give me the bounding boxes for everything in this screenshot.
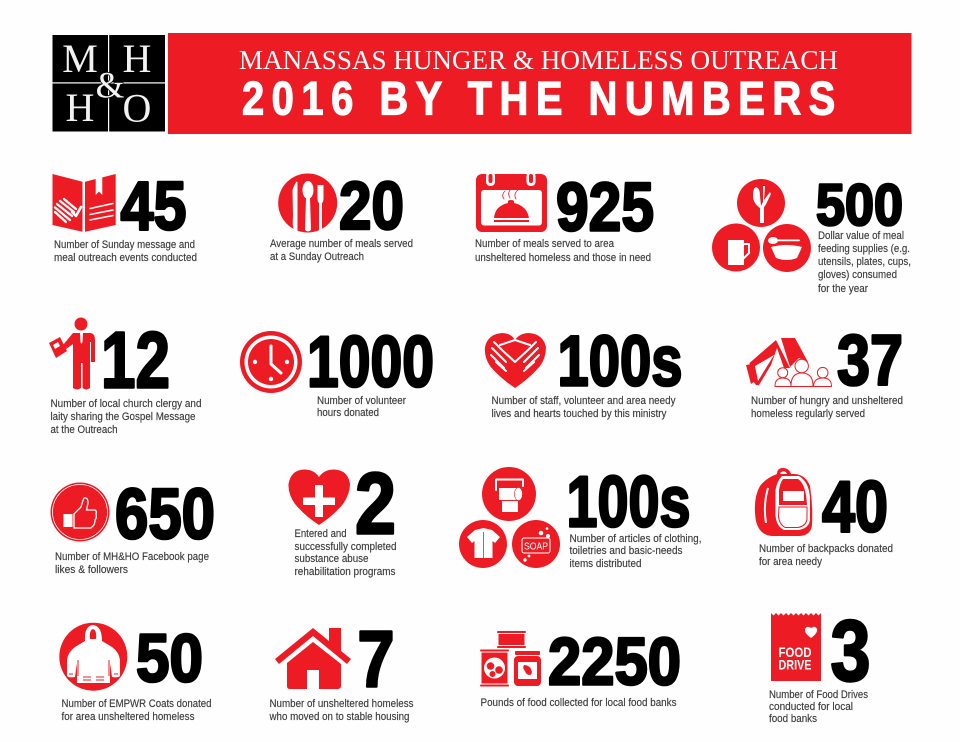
description: Number of EMPWR Coats donated: [62, 698, 212, 710]
description: Number of MH&HO Facebook page: [55, 551, 209, 563]
description: Number of unsheltered homeless: [270, 698, 414, 710]
number: 100s: [566, 462, 690, 542]
description: likes & followers: [55, 564, 128, 576]
description: [570, 533, 702, 570]
description: for area needy: [759, 556, 822, 568]
description: Entered and: [294, 528, 346, 540]
number: 2250: [548, 624, 681, 700]
description: [269, 698, 414, 723]
description: at the Outreach: [50, 424, 118, 436]
stat: 7 stable housing: [269, 614, 414, 723]
stat: 1000 volunteer hours: [240, 322, 434, 419]
description: for the year: [818, 283, 868, 295]
banner subtitle: MANASSAS HUNGER & HOMELESS OUTREACH: [239, 44, 838, 75]
stat: 2250 pounds of food: [480, 624, 681, 709]
description: for area unsheltered homeless: [62, 711, 195, 723]
description: [751, 395, 903, 420]
description: homeless regularly served: [751, 408, 865, 420]
icon: food drive bag: FOOD: [778, 644, 812, 660]
stat: 50 EMPWR coats: [59, 620, 212, 723]
number: 1000: [307, 322, 434, 402]
description: [294, 528, 396, 578]
logo: MH&HO: M: [62, 36, 98, 81]
number: 100s: [558, 322, 682, 402]
description: feeding supplies (e.g.: [818, 243, 910, 255]
description: who moved on to stable housing: [269, 711, 410, 723]
description: utensils, plates, cups,: [818, 256, 911, 268]
icon: toiletries, shirt and soap: [459, 467, 560, 568]
logo: MH&HO: [52, 35, 165, 132]
stat: 650 Facebook likes: [50, 476, 215, 576]
description: [54, 239, 197, 264]
description: [759, 543, 893, 568]
stat: 40 backpacks: [755, 468, 893, 568]
icon: toiletries, shirt and soap: SOAP: [524, 540, 548, 552]
description: substance abuse: [294, 553, 368, 565]
description: Average number of meals served: [270, 238, 413, 250]
icon: thumbs up: [50, 482, 110, 542]
stat: 3 food drives: [769, 604, 870, 725]
icon: food drive bag: [771, 613, 821, 681]
logo: MH&HO: H: [123, 36, 151, 81]
icon: clock: [240, 331, 302, 393]
description: Number of Food Drives: [769, 689, 868, 701]
icon: coat in circle: [59, 623, 127, 691]
banner title: 2016 BY THE NUMBERS: [242, 74, 835, 125]
description: Number of volunteer: [317, 395, 406, 407]
description: conducted for local: [769, 701, 853, 713]
number: 7: [358, 614, 394, 704]
description: [769, 689, 868, 725]
description: Number of staff, volunteer and area needy: [492, 395, 676, 407]
description: [270, 238, 413, 263]
logo: MH&HO: H: [66, 85, 94, 130]
description: food banks: [769, 713, 817, 725]
number: 40: [822, 468, 888, 548]
number: 2: [355, 456, 396, 552]
number: 500: [816, 173, 903, 238]
icon: cans and jar: [480, 631, 541, 686]
number: 925: [556, 168, 654, 246]
number: 37: [837, 322, 903, 400]
stat: 37 regularly served: [746, 322, 903, 420]
stat: 12 clergy and laity: [49, 316, 202, 436]
description: [492, 395, 676, 420]
icon: book with hands: [52, 174, 116, 232]
description: Number of Sunday message and: [54, 239, 195, 251]
description: Number of backpacks donated: [759, 543, 893, 555]
description: meal outreach events conducted: [54, 252, 197, 264]
logo: MH&HO: &: [96, 66, 125, 106]
description: Number of meals served to area: [475, 238, 615, 250]
description: Dollar value of meal: [818, 230, 904, 242]
icon: heart with plus: [288, 470, 350, 525]
number: 50: [136, 620, 203, 696]
stat: 2 rehabilitation: [288, 456, 396, 578]
description: laity sharing the Gospel Message: [50, 411, 196, 423]
description: lives and hearts touched by this ministry: [492, 408, 667, 420]
stat: 925 meals to homeless: [475, 168, 654, 264]
number: 20: [339, 168, 404, 244]
stat: 20 meals per Sunday: [270, 168, 413, 263]
description: unsheltered homeless and those in need: [475, 252, 651, 264]
description: successfully completed: [294, 541, 396, 553]
number: 3: [830, 604, 870, 700]
description: rehabilitation programs: [294, 566, 396, 578]
description: Number of hungry and unsheltered: [751, 395, 903, 407]
number: 12: [101, 316, 170, 404]
icon: house: [275, 628, 351, 689]
header banner: [168, 33, 912, 134]
description: [317, 395, 406, 419]
logo: MH&HO: O: [123, 86, 151, 130]
description: [55, 551, 209, 576]
stat: 500 dollars of supplies: [712, 173, 911, 295]
description: [475, 238, 651, 264]
description: at a Sunday Outreach: [270, 251, 364, 263]
number: 650: [115, 476, 215, 554]
icon: tent and people: [746, 338, 832, 386]
description: toiletries and basic-needs: [570, 545, 683, 557]
description: items distributed: [570, 558, 642, 570]
description: [50, 398, 202, 436]
icon: calendar with cloche: [476, 172, 547, 232]
stat: 100s articles distributed: [459, 462, 702, 570]
icon: heart with hands: [485, 333, 546, 388]
icon: person with book: [49, 318, 95, 390]
description: gloves) consumed: [818, 269, 897, 281]
description: hours donated: [317, 407, 379, 419]
stat: 45 Sunday events: [52, 168, 197, 264]
description: [62, 698, 212, 723]
icon: cutlery in circle: [278, 174, 337, 232]
description: Pounds of food collected for local food banks: [480, 697, 677, 709]
icon: three circles of dinnerware: [712, 179, 811, 272]
icon: backpack: [755, 468, 812, 536]
stat: 100s lives touched: [485, 322, 682, 420]
description: Number of local church clergy and: [50, 398, 202, 410]
number: 45: [120, 168, 186, 244]
description: Number of articles of clothing,: [570, 533, 702, 545]
icon: food drive bag: DRIVE: [778, 656, 812, 672]
description: [818, 230, 911, 295]
